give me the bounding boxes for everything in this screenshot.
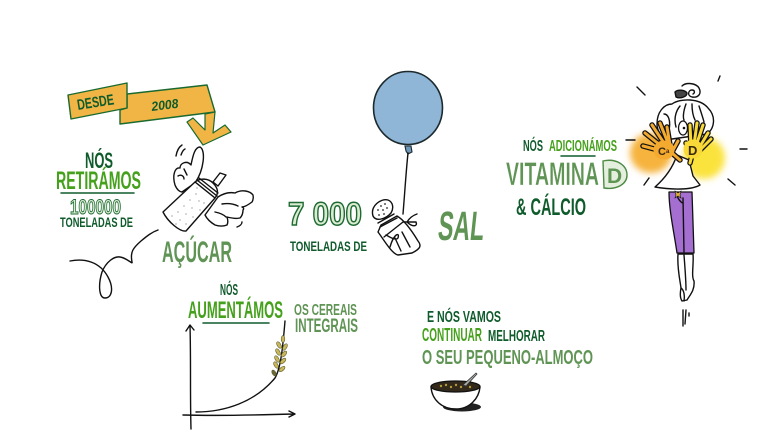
- hair: [657, 100, 714, 140]
- text: e nós vamos continuar melhorar: [422, 307, 545, 345]
- text: nós adicionámos vitamina d e cálcio: ADICIONÁMOS: [549, 136, 617, 155]
- text: os cereais integrais: OS CEREAIS: [294, 302, 357, 319]
- trousers: [669, 192, 694, 253]
- banner: desde 2008: DESDE: [76, 91, 115, 114]
- text: o seu pequeno-almoço: O SEU PEQUENO-ALMOÇO: [422, 347, 593, 369]
- text: nós retirámos 100000 toneladas de: NÓS: [85, 148, 113, 173]
- hand right: [684, 123, 711, 163]
- banner: desde 2008: 2008: [150, 96, 180, 114]
- text: nós aumentámos: AUMENTÁMOS: [188, 296, 283, 324]
- hand left: [643, 123, 680, 160]
- text: nós retirámos 100000 toneladas de: RETIRÁMOS: [56, 166, 141, 195]
- text: os cereais integrais: [294, 302, 358, 337]
- text: nós retirámos 100000 toneladas de: 100000: [70, 196, 121, 219]
- text: nós adicionámos vitamina d e cálcio: & CÁLCIO: [516, 193, 586, 221]
- motion lines: [683, 310, 689, 326]
- text: 7 000 toneladas de: 7 000: [288, 196, 362, 232]
- icon: salt shaker tied to balloon: [372, 200, 420, 255]
- face: [678, 121, 688, 135]
- text: 7 000 toneladas de: [288, 196, 367, 254]
- text: nós aumentámos: [188, 280, 283, 324]
- text: nós adicionámos vitamina d e cálcio: VITAMINA: [506, 156, 599, 192]
- swirl line: [70, 230, 158, 298]
- icon: winged sugar shaker: [163, 145, 253, 231]
- hand right: D: [688, 143, 697, 158]
- text: nós retirámos 100000 toneladas de: TONELADAS DE: [60, 214, 133, 230]
- illustration: woman with vitamin hands: [626, 76, 747, 326]
- icon: wheat ear: [271, 336, 288, 377]
- banner: desde 2008: [68, 83, 215, 124]
- text: os cereais integrais: INTEGRAIS: [295, 316, 358, 337]
- text: nós retirámos 100000 toneladas de: [56, 148, 141, 230]
- text: e nós vamos continuar melhorar: MELHORAR: [488, 328, 545, 345]
- text: nós aumentámos: NÓS: [220, 280, 238, 299]
- text: nós adicionámos vitamina d e cálcio: D: [607, 165, 622, 188]
- text: e nós vamos continuar melhorar: CONTINUAR: [422, 325, 482, 345]
- rays: [626, 76, 747, 185]
- balloon: [374, 72, 442, 214]
- icon: cereal bowl: [431, 373, 481, 412]
- hand left: a: [666, 149, 670, 155]
- legs and feet: [678, 254, 694, 301]
- text: nós adicionámos vitamina d e cálcio: NÓS: [523, 136, 543, 155]
- blouse: [655, 155, 700, 189]
- hand left: C: [658, 146, 666, 158]
- text: nós adicionámos vitamina d e cálcio: [506, 136, 627, 221]
- text: e nós vamos continuar melhorar: E NÓS VAMOS: [427, 307, 501, 326]
- word: açúcar: AÇÚCAR: [162, 235, 232, 269]
- text: 7 000 toneladas de: TONELADAS DE: [290, 238, 367, 254]
- word: sal: SAL: [436, 203, 487, 249]
- arrow: banner pointing down to shaker: [187, 112, 231, 145]
- chart: rising wholegrain curve with axes: [183, 321, 295, 429]
